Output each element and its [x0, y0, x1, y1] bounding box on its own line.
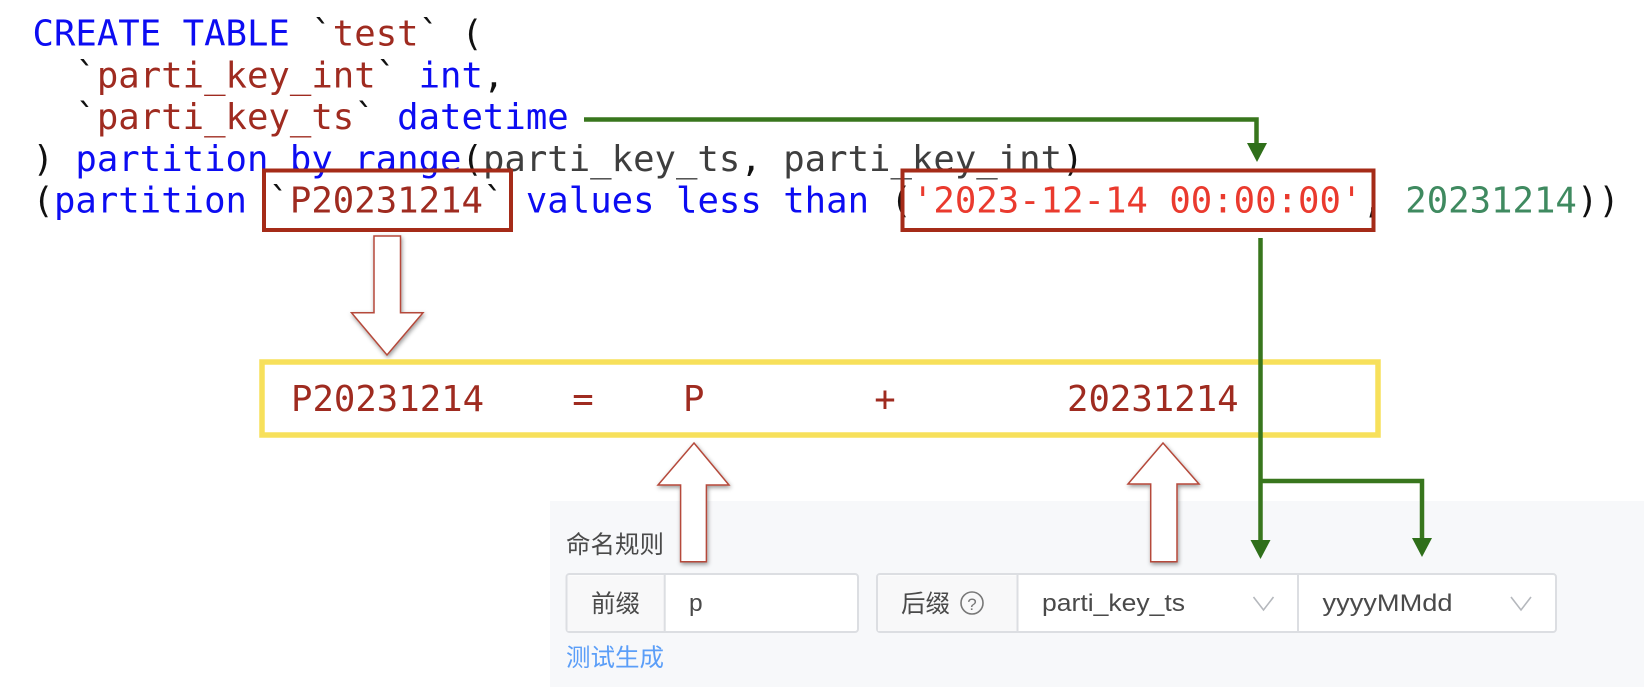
arrow: suffix up — [1128, 443, 1199, 562]
highlight: partition name — [264, 170, 511, 230]
input group: prefix — [566, 574, 858, 632]
input group: prefix: 前缀 — [591, 590, 640, 618]
expression box: P20231214 — [291, 379, 484, 420]
arrow: down to partition expression — [352, 236, 423, 355]
expression box: P — [683, 379, 704, 420]
code block: create table: `parti_key_ts` datetime — [75, 97, 569, 138]
code block: create table: CREATE TABLE `test` ( — [32, 14, 483, 55]
input group: suffix — [877, 574, 1556, 632]
expression box: = — [572, 379, 594, 420]
input group: suffix: parti_key_ts — [1042, 590, 1185, 617]
code block: create table: `parti_key_int` int, — [75, 56, 504, 96]
link: test generate: 测试生成 — [566, 644, 664, 672]
arrow: datetime to value — [584, 120, 1267, 162]
input group: suffix: yyyyMMdd — [1322, 590, 1452, 617]
code block: create table: ) partition by range(parti_key_ts, parti_key_int) — [32, 139, 1084, 180]
icon: help — [961, 592, 983, 614]
expression box: 20231214 — [1067, 379, 1239, 420]
code block: create table: (partition `P20231214` values less than ('2023-12-14 00:00:00', 20231214)) — [32, 181, 1620, 222]
panel: naming rule form — [550, 501, 1644, 687]
arrows: value to suffix fields — [1250, 238, 1432, 559]
icon: help: ? — [967, 595, 977, 614]
expression box — [262, 362, 1378, 435]
icon: chevron — [1511, 597, 1531, 610]
code block: create table — [32, 14, 1620, 222]
arrow: prefix up — [658, 443, 729, 562]
icon: chevron — [1254, 597, 1274, 610]
label: naming rule: 命名规则 — [566, 531, 664, 559]
input group: suffix: 后缀 — [901, 590, 950, 618]
highlight: partition value — [902, 170, 1374, 230]
input group: prefix: p — [689, 590, 703, 617]
expression box: + — [874, 379, 896, 420]
